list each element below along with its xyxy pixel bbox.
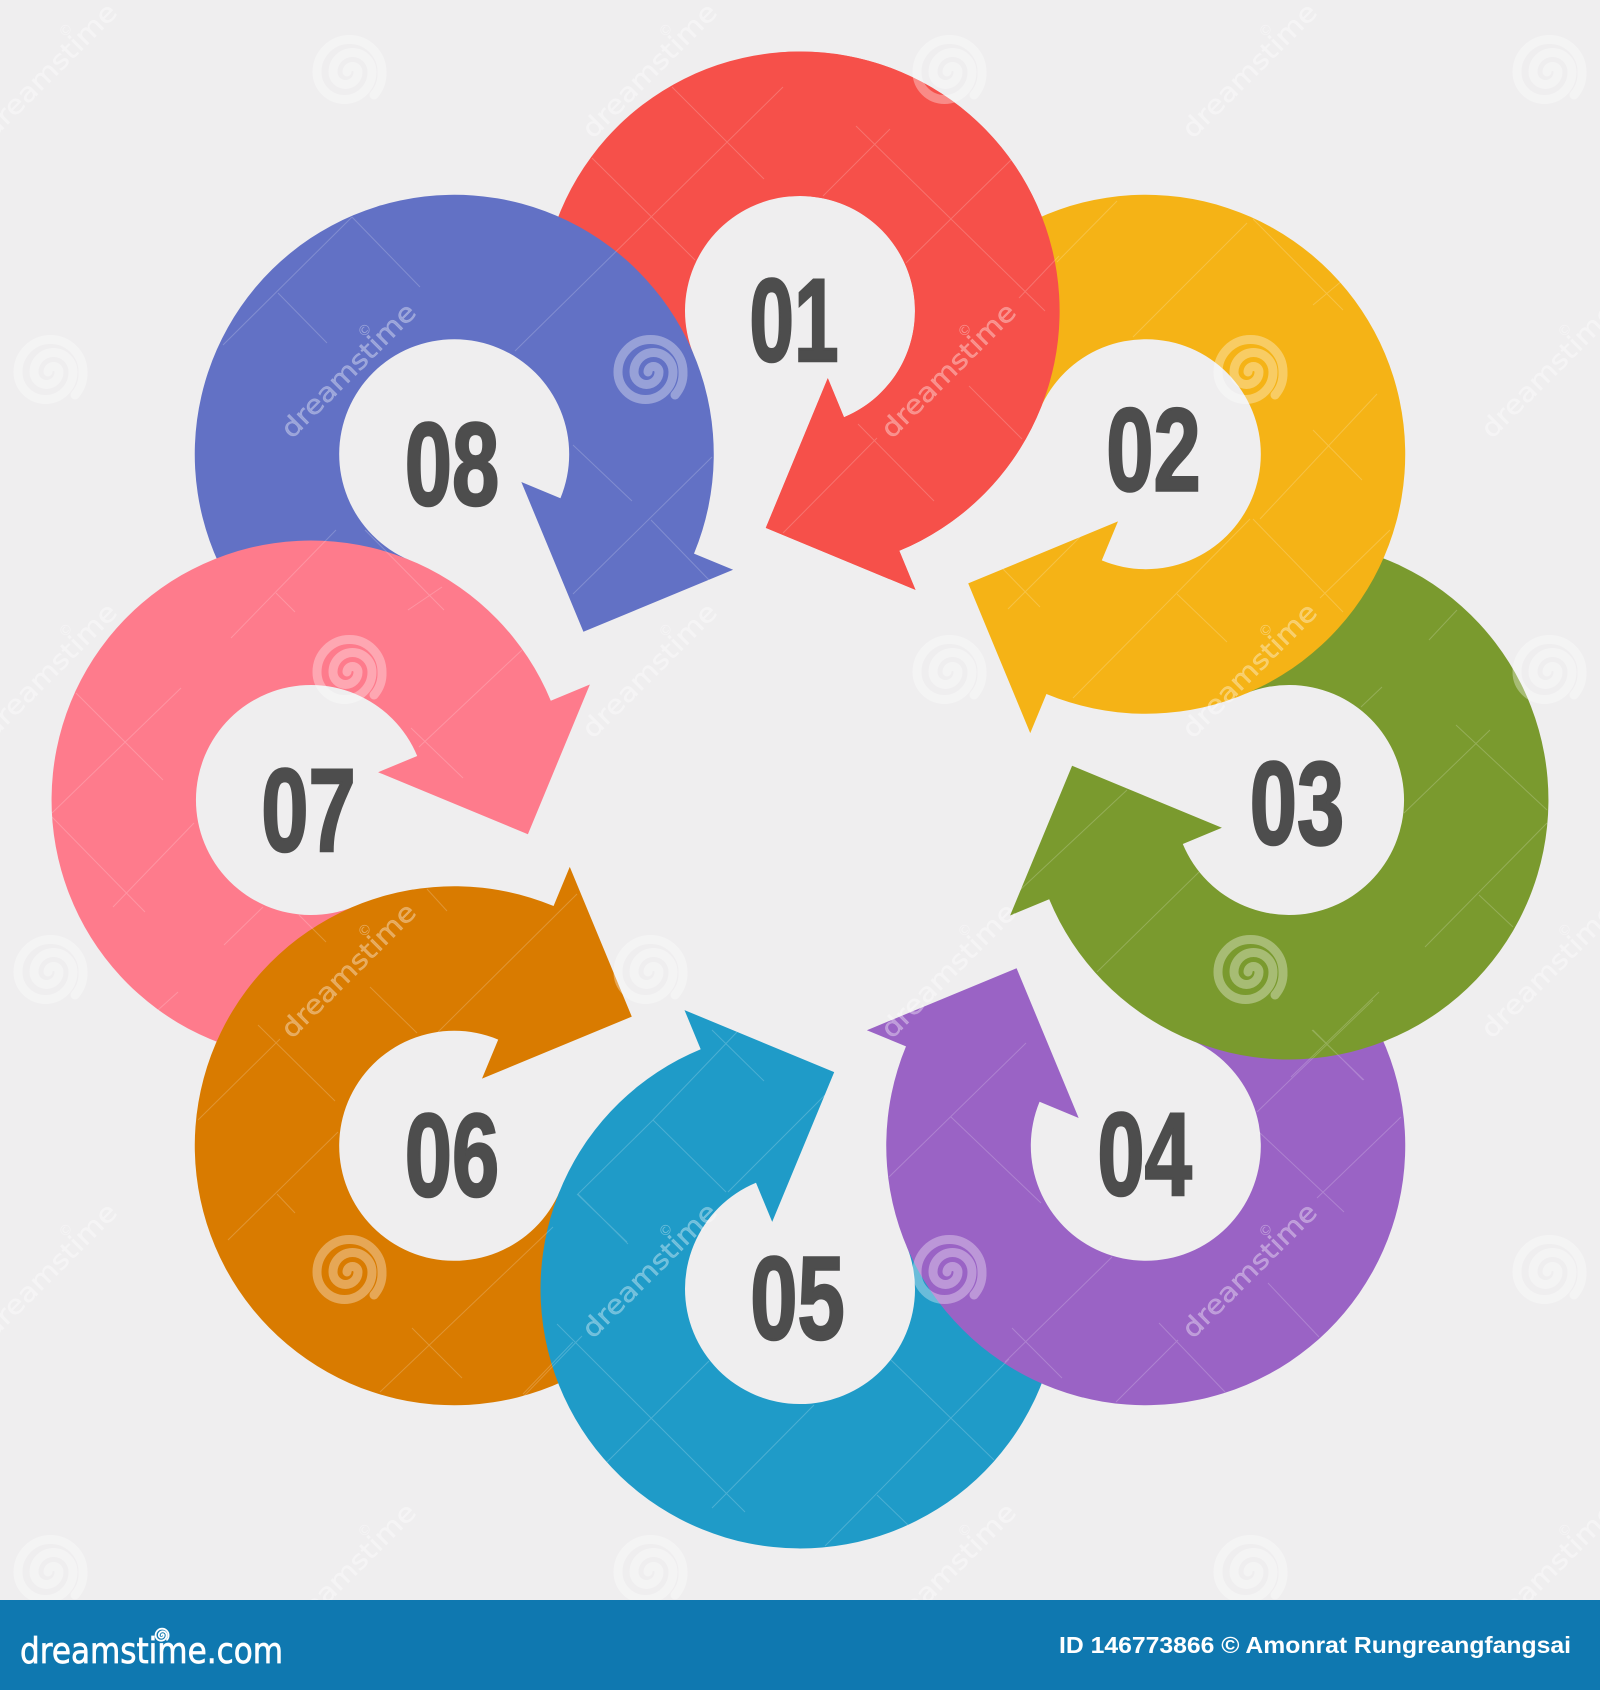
watermark text: © xyxy=(656,1220,677,1241)
footer logo spiral icon xyxy=(156,1629,169,1641)
watermark text: © xyxy=(56,20,77,41)
watermark text: © xyxy=(1256,20,1277,41)
number 08: 08 xyxy=(405,398,499,530)
number 02: 02 xyxy=(1106,384,1201,516)
arrow 07 (pink) xyxy=(52,541,590,1060)
watermark text: dreamstime xyxy=(576,0,724,145)
footer band xyxy=(0,1600,1600,1690)
arrow 05 (blue) xyxy=(541,1010,1060,1548)
footer credit: ID 146773866 © Amonrat Rungreangfangsai xyxy=(1059,1632,1571,1658)
watermark text: © xyxy=(355,320,376,341)
watermark text: © xyxy=(355,920,376,941)
watermark text: © xyxy=(1256,1220,1277,1241)
watermark text: © xyxy=(656,20,677,41)
watermark text: dreamstime xyxy=(1176,0,1324,145)
watermark text: © xyxy=(355,1520,376,1541)
watermark text: © xyxy=(955,320,976,341)
number 06: 06 xyxy=(405,1089,499,1221)
watermark text: dreamstime xyxy=(1176,597,1324,745)
watermark text: © xyxy=(1555,320,1576,341)
arrow 06 (orange) xyxy=(87,765,835,1513)
watermark text: © xyxy=(56,1220,77,1241)
watermark text: dreamstime xyxy=(875,297,1023,445)
watermark text: © xyxy=(955,1520,976,1541)
number 01: 01 xyxy=(749,256,839,387)
number 07: 07 xyxy=(261,744,356,876)
footer logo text: dreamstime.com xyxy=(20,1631,283,1672)
watermark text: dreamstime xyxy=(576,597,724,745)
watermark text: © xyxy=(1256,620,1277,641)
number 03: 03 xyxy=(1250,737,1344,869)
watermark text: © xyxy=(56,620,77,641)
arrow 01 tail (red, lowest layer) xyxy=(540,52,1059,590)
watermark text: dreamstime xyxy=(275,1497,423,1645)
arrow 04 (purple) xyxy=(765,765,1513,1513)
number 04: 04 xyxy=(1097,1088,1192,1220)
watermark text: © xyxy=(656,620,677,641)
arrow 01 head (red, top layer over yellow) xyxy=(766,52,1060,590)
watermark text: dreamstime xyxy=(875,897,1023,1045)
watermark text: dreamstime xyxy=(1176,1197,1324,1345)
watermark text: © xyxy=(955,920,976,941)
watermark text: dreamstime xyxy=(875,1497,1023,1645)
arrow 02 (yellow) xyxy=(765,87,1513,835)
watermark text: dreamstime xyxy=(275,297,423,445)
watermark text: © xyxy=(1555,1520,1576,1541)
arrow 08 (indigo) xyxy=(87,87,835,835)
watermark text: dreamstime xyxy=(275,897,423,1045)
arrow 03 (green) xyxy=(1010,540,1548,1059)
number 05: 05 xyxy=(750,1232,845,1364)
watermark text: © xyxy=(1555,920,1576,941)
watermark text: dreamstime xyxy=(576,1197,724,1345)
